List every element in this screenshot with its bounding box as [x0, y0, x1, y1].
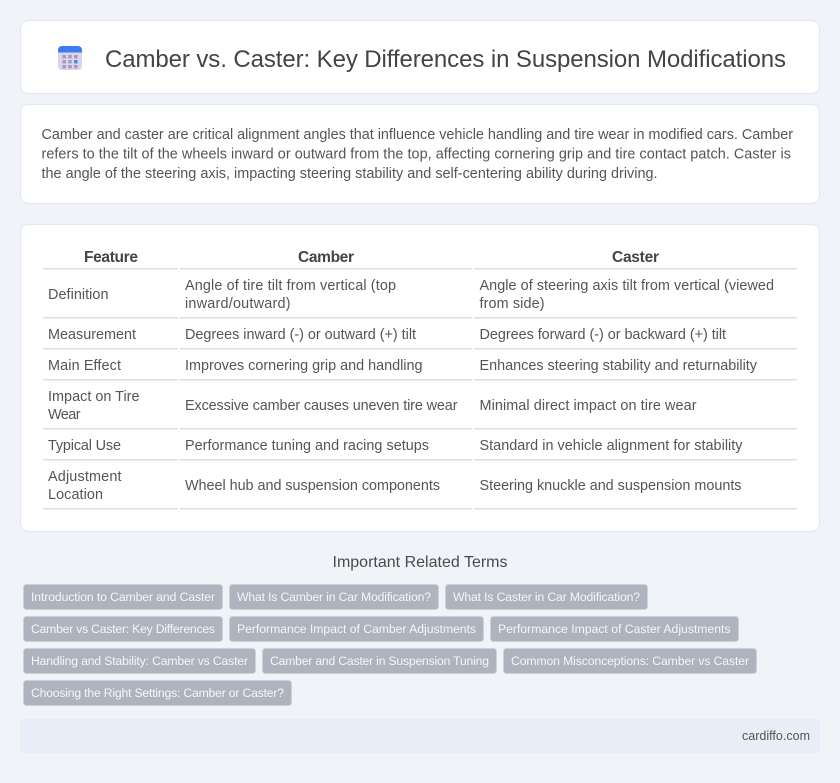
chip: Camber vs Caster: Key Differences [31, 622, 215, 636]
title: Camber vs. Caster: Key Differences in Suspension Modifications [105, 46, 786, 73]
row: definition: from side) [480, 296, 544, 312]
chip [230, 616, 484, 642]
row: main effect: Improves cornering grip and handling [185, 358, 422, 374]
table rules [43, 268, 797, 510]
row: adjustment location: Wheel hub and suspension components [185, 478, 440, 494]
row: adjustment location: Steering knuckle and suspension mounts [480, 478, 742, 494]
chip: Introduction to Camber and Caster [31, 590, 215, 604]
chip [490, 616, 738, 642]
chip [262, 648, 496, 674]
chip: What Is Camber in Car Modification? [237, 590, 431, 604]
chip: Common Misconceptions: Camber vs Caster [511, 654, 749, 668]
text block: introduction: Camber and caster are critical alignment angles that influence vehicle handling and tire wear in modified cars. Camber [42, 127, 793, 143]
heading: related terms: Important Related Terms [332, 554, 508, 571]
text block: introduction: the angle of the steering axis, impacting steering stability and self-centering ability during driving. [42, 166, 658, 182]
footer source: cardiffo.com [742, 729, 810, 743]
row: definition: inward/outward) [185, 296, 290, 312]
row: impact on tire wear [48, 389, 697, 423]
row: impact on tire wear: Wear [48, 407, 81, 423]
chip [24, 584, 222, 610]
row: main effect [48, 358, 758, 374]
table header: Caster [612, 249, 659, 266]
footer [20, 719, 820, 753]
chip: Handling and Stability: Camber vs Caster [31, 654, 248, 668]
row: definition: Angle of tire tilt from vertical (top [185, 278, 396, 294]
row: typical use [48, 438, 743, 454]
chip [504, 648, 756, 674]
chip [24, 616, 222, 642]
row: typical use: Performance tuning and racing setups [185, 438, 429, 454]
row: measurement: Degrees forward (-) or backward (+) tilt [480, 327, 726, 343]
row: adjustment location [48, 469, 742, 503]
chip: Choosing the Right Settings: Camber or Caster? [31, 686, 284, 700]
row: adjustment location: Location [48, 487, 103, 503]
table header [84, 249, 659, 266]
row: main effect: Enhances steering stability and returnability [480, 358, 758, 374]
table header: Camber [298, 249, 354, 266]
icon: calendar [58, 46, 82, 70]
row: main effect: Main Effect [48, 358, 121, 374]
table header: Feature [84, 249, 138, 266]
chip [446, 584, 648, 610]
row: impact on tire wear: Excessive camber causes uneven tire wear [185, 398, 458, 414]
row: definition: Definition [48, 287, 108, 303]
row: impact on tire wear: Impact on Tire [48, 389, 140, 405]
row: definition: Angle of steering axis tilt from vertical (viewed [480, 278, 774, 294]
row: measurement: Degrees inward (-) or outward (+) tilt [185, 327, 416, 343]
chip: Performance Impact of Caster Adjustments [498, 622, 730, 636]
row: typical use: Standard in vehicle alignment for stability [480, 438, 743, 454]
panel: comparison table [20, 224, 820, 532]
chip: What Is Caster in Car Modification? [453, 590, 640, 604]
row: measurement [48, 327, 726, 343]
related term chips [24, 584, 756, 706]
chip [24, 680, 292, 706]
row: adjustment location: Adjustment [48, 469, 122, 485]
text block: introduction: refers to the tilt of the wheels inward or outward from the top, affecting cornering grip and tire contact patch. Caster is [42, 146, 791, 162]
row: typical use: Typical Use [48, 438, 121, 454]
text block: introduction [42, 127, 793, 182]
row: measurement: Measurement [48, 327, 136, 343]
panel: header [20, 20, 820, 94]
chip [230, 584, 438, 610]
chip: Camber and Caster in Suspension Tuning [270, 654, 489, 668]
chip [24, 648, 256, 674]
row: definition [48, 278, 774, 312]
chip: Performance Impact of Camber Adjustments [237, 622, 476, 636]
panel: introduction [20, 104, 820, 204]
row: impact on tire wear: Minimal direct impact on tire wear [480, 398, 697, 414]
